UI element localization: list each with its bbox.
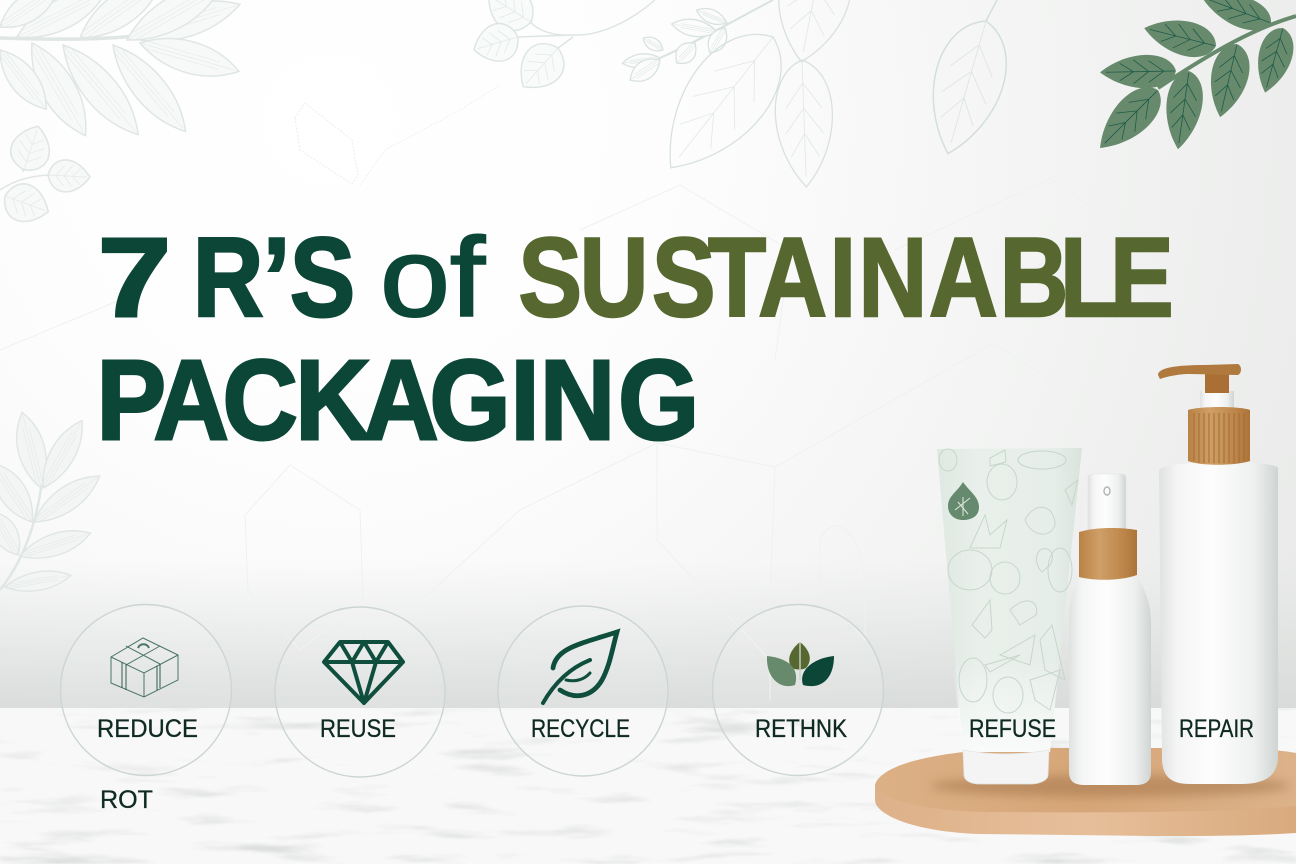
tube cap bbox=[963, 750, 1049, 784]
title line 1: 7 R'S: R’S bbox=[193, 215, 355, 340]
faint fern: top left bbox=[0, 0, 245, 145]
marble table surface bbox=[0, 708, 1296, 864]
title bbox=[97, 215, 1174, 464]
icon: gift box bbox=[111, 638, 178, 697]
label: REDUCE: REDUCE bbox=[97, 715, 198, 743]
badge: reuse bbox=[275, 607, 445, 777]
label: REFUSE: REFUSE bbox=[969, 715, 1056, 743]
icon: three leaves bbox=[767, 642, 834, 686]
faint large leaves: top centre bbox=[639, 0, 860, 192]
faint sprig: upper left bbox=[0, 120, 91, 229]
label: RECYCLE: RECYCLE bbox=[531, 715, 630, 743]
product: pump bottle bbox=[1158, 364, 1278, 784]
tube illustrations bbox=[939, 449, 1078, 713]
branch with green leaves bbox=[1087, 0, 1296, 161]
wooden tray bbox=[875, 748, 1296, 836]
badge: reduce bbox=[60, 604, 232, 776]
cap ribs bbox=[1194, 413, 1244, 463]
product: squeeze tube bbox=[937, 448, 1082, 784]
tube logo bbox=[948, 482, 979, 520]
icon: diamond bbox=[324, 642, 403, 703]
label: RETHNK: RETHNK bbox=[755, 715, 847, 743]
label: REPAIR: REPAIR bbox=[1179, 715, 1254, 743]
faint leaf sprig: top centre bbox=[621, 0, 773, 88]
icon: leaf bbox=[543, 632, 617, 703]
title line 1: 7 R'S bbox=[98, 215, 355, 340]
label: ROT: ROT bbox=[100, 786, 153, 814]
faint large leaf: top right bbox=[915, 0, 1019, 163]
label: REUSE: REUSE bbox=[320, 715, 396, 743]
title line 1: SUSTAINABLE: SUSTAINABLE bbox=[519, 216, 1174, 341]
title line 1: of: of bbox=[380, 215, 486, 340]
faint sprig: top centre left bbox=[469, 0, 655, 100]
badge: rethink bbox=[712, 604, 884, 776]
product: spray bottle bbox=[1069, 474, 1151, 785]
title line 1: 7 R'S: 7 bbox=[98, 215, 171, 340]
title line 2: PACKAGING: PACKAGING bbox=[97, 338, 699, 464]
faint fern: lower left bbox=[0, 409, 106, 596]
faint hexagon pattern bbox=[0, 85, 1180, 700]
badge: recycle bbox=[498, 606, 668, 776]
